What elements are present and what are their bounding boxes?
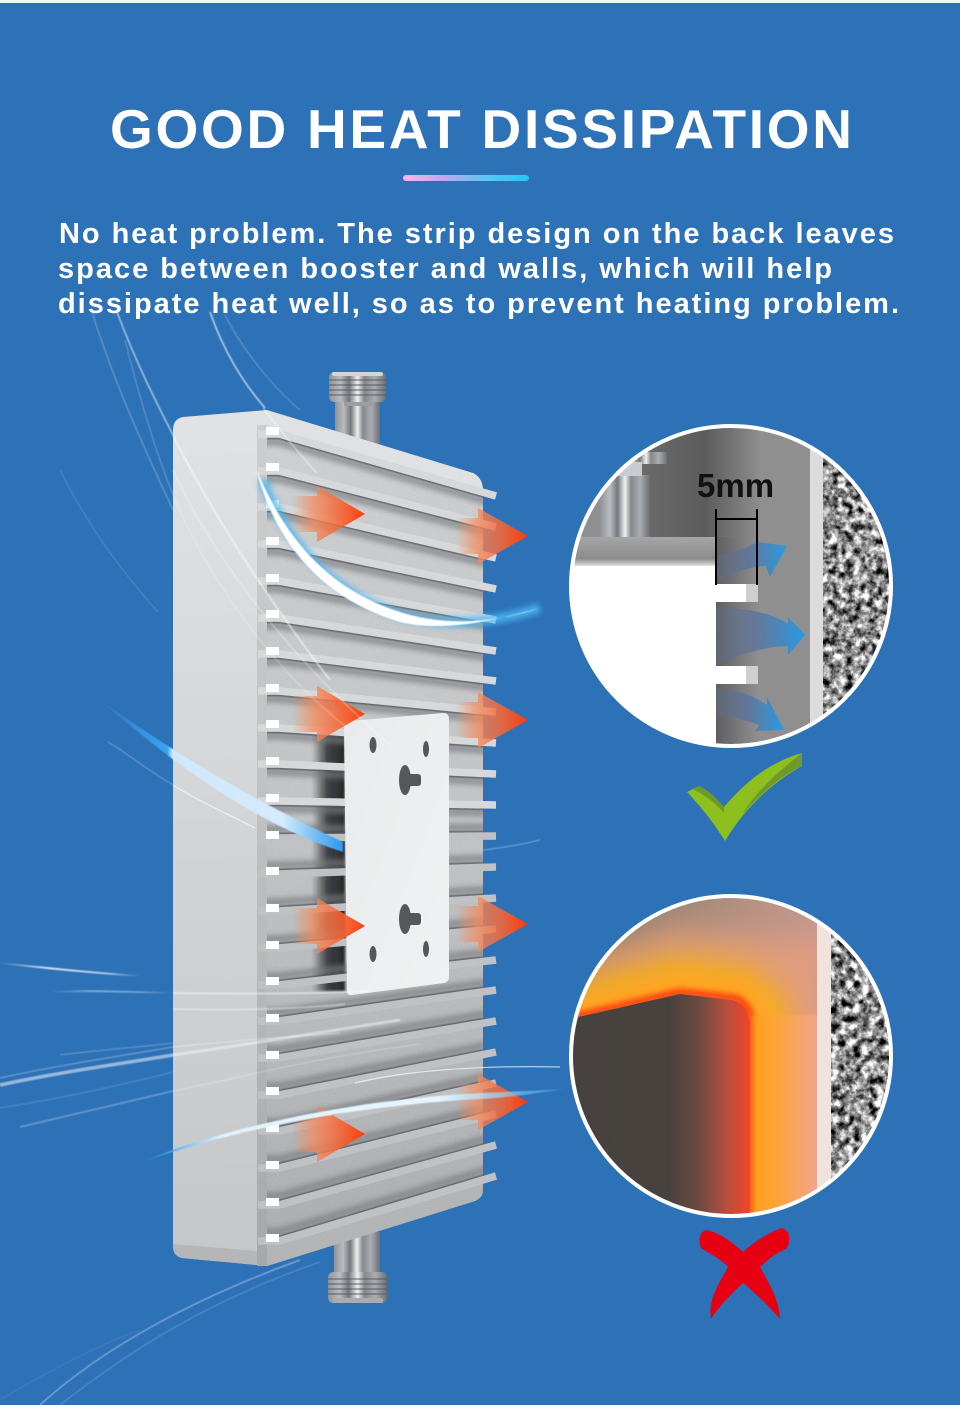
icon: green check mark — [687, 753, 802, 841]
wall aggregate texture — [831, 934, 889, 1178]
heat arrows: right column — [456, 508, 528, 1130]
middle swirl — [100, 700, 343, 852]
device corner in heat view — [565, 994, 750, 1225]
description text: No heat problem. The strip design on the back leaves — [59, 218, 894, 250]
icon: red cross mark — [700, 1228, 789, 1319]
right glow — [749, 1015, 818, 1220]
bottom connector — [328, 1232, 387, 1303]
blue airflow arrows — [716, 542, 805, 731]
5mm label: 5mm — [697, 467, 774, 504]
heat arrows: left column — [292, 486, 365, 1162]
background wind streaks — [0, 312, 540, 1405]
wall gap backdrop — [580, 430, 810, 742]
mounting plate — [344, 713, 449, 995]
dimension bracket — [716, 509, 757, 585]
description text: space between booster and walls, which will help — [58, 253, 832, 285]
heat glow — [545, 975, 770, 1230]
circle outline — [571, 896, 891, 1216]
wall plaster — [810, 449, 823, 723]
mounting holes — [370, 737, 429, 962]
wall plaster — [817, 924, 831, 1188]
device body — [570, 566, 716, 749]
wall aggregate texture — [823, 458, 889, 714]
airflow streaks over device — [100, 408, 565, 1163]
title accent bar — [403, 175, 529, 181]
description text: dissipate heat well, so as to prevent heating problem. — [58, 288, 899, 320]
upper swirl — [256, 468, 540, 626]
connector in detail view — [600, 452, 667, 538]
signal booster device — [173, 410, 496, 1266]
hot air backdrop — [589, 898, 817, 1188]
description text — [58, 218, 899, 320]
recess — [716, 540, 750, 744]
fins in detail view — [716, 584, 758, 684]
soft white streaks — [173, 408, 420, 1091]
circle outline — [571, 426, 891, 746]
detail circle: 5mm gap — [570, 425, 895, 749]
title: GOOD HEAT DISSIPATION — [110, 98, 852, 160]
device left side face — [173, 410, 267, 1266]
detail circle: overheating — [569, 894, 893, 1218]
device finned back — [257, 410, 496, 1266]
device bottom edge shading — [173, 1244, 267, 1266]
lower swirl — [140, 1089, 565, 1163]
device top band — [570, 537, 716, 567]
top connector — [329, 372, 386, 448]
